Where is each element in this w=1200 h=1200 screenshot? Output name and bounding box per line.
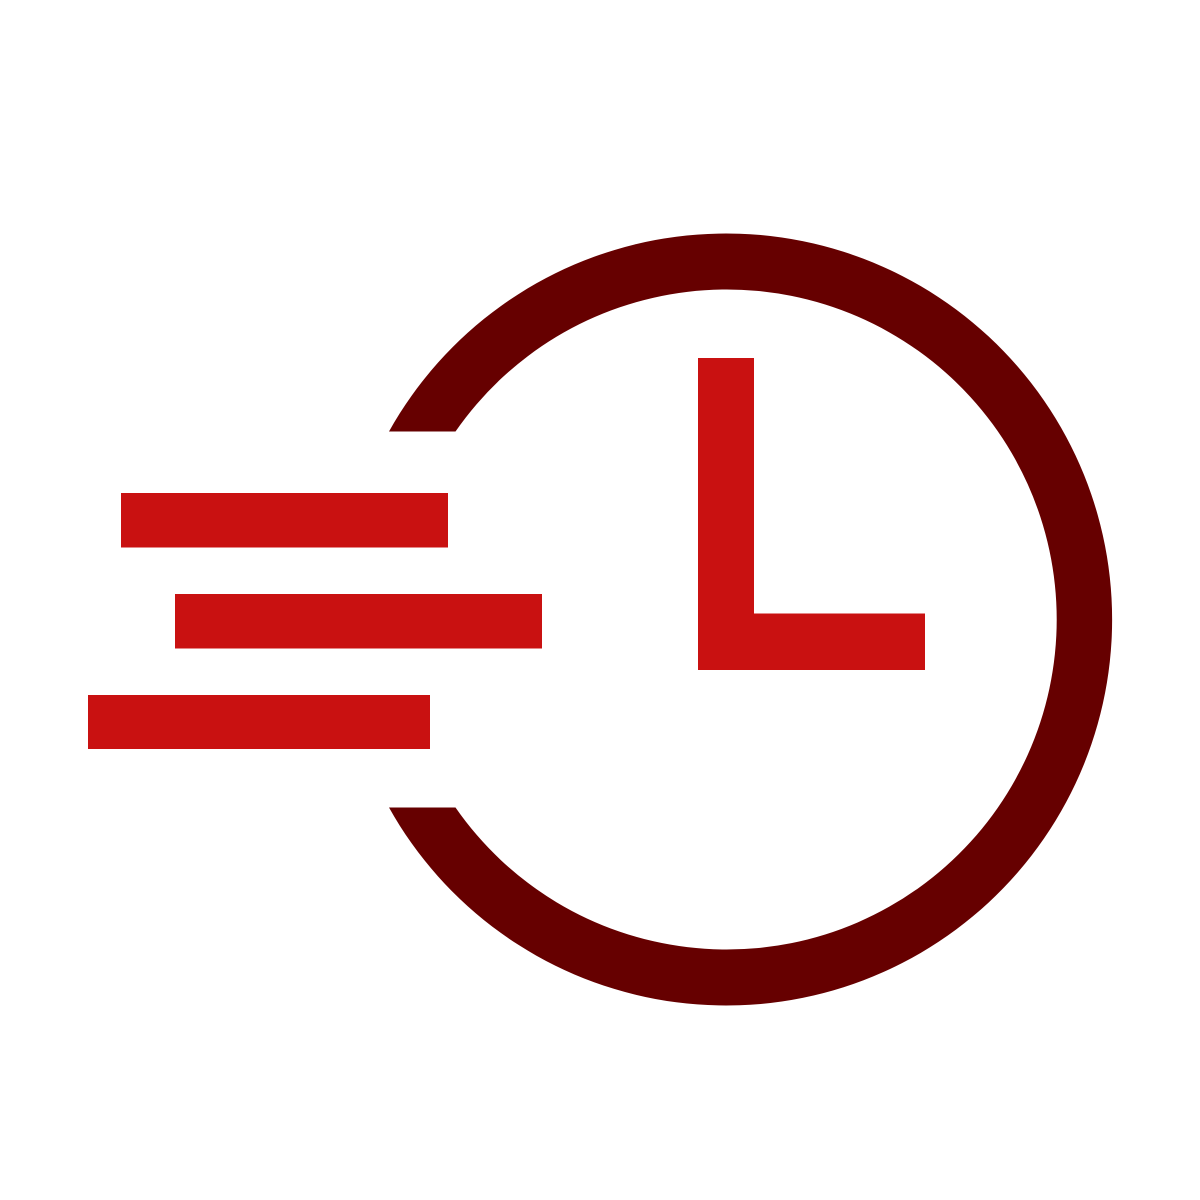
icon: clock hands [698,358,925,670]
speed line: top [121,493,448,548]
speed line: bottom [88,695,430,749]
speed line: middle [175,594,542,648]
icon: speed lines [88,493,542,749]
icon: clock ring [389,233,1112,1005]
